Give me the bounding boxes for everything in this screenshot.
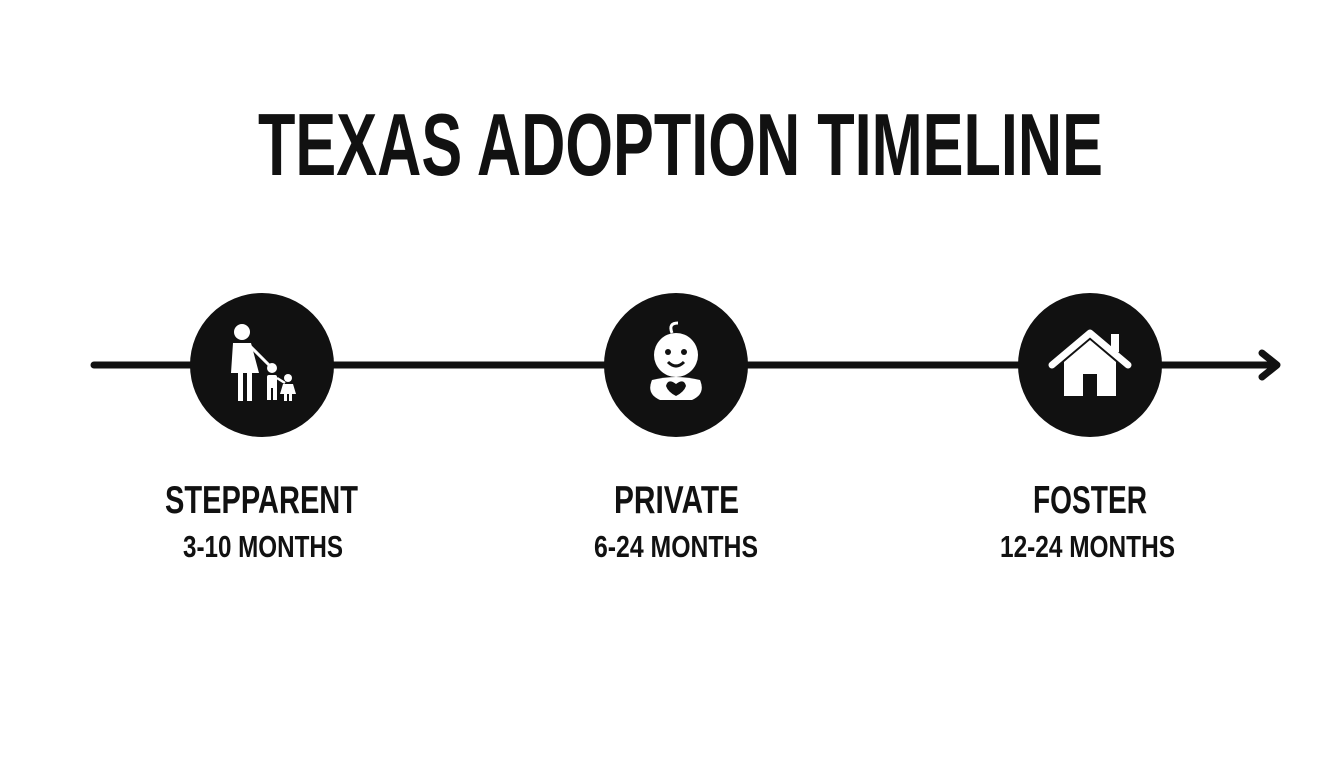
icon: stepparent family — [190, 293, 334, 437]
label: stepparent: STEPPARENT — [165, 479, 358, 522]
label: foster: 12-24 MONTHS — [1000, 529, 1175, 564]
label: private — [594, 479, 758, 564]
label: stepparent — [165, 479, 358, 564]
label: private: PRIVATE — [614, 479, 739, 522]
icon: house — [1018, 293, 1162, 437]
label: foster — [1000, 479, 1175, 564]
icon: baby — [604, 293, 748, 437]
label: foster: FOSTER — [1033, 479, 1147, 522]
timeline arrow — [94, 353, 1277, 377]
label: private: 6-24 MONTHS — [594, 529, 758, 564]
label: stepparent: 3-10 MONTHS — [183, 529, 343, 564]
